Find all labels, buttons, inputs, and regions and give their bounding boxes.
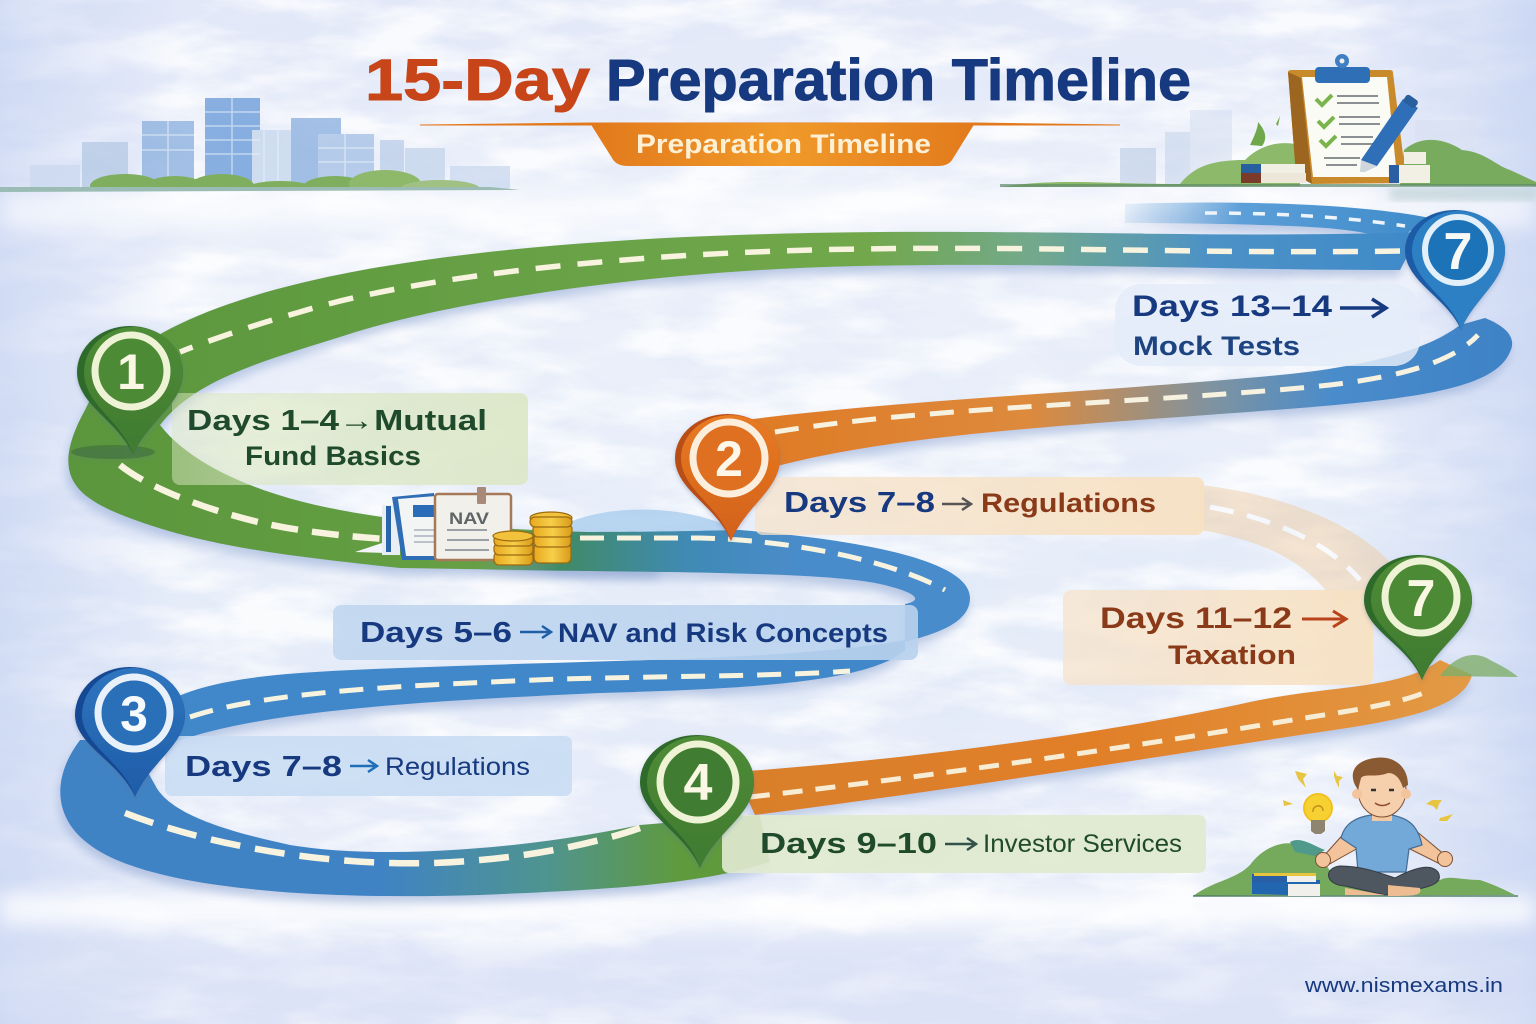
road: blue bend — [480, 527, 970, 642]
label: days 9-10: Investor Services — [983, 830, 1182, 858]
road: orange to blue upper band — [745, 318, 1512, 468]
pin 3: 3 — [120, 686, 148, 742]
title — [365, 48, 1191, 113]
pin 7 blue: 7 — [1444, 223, 1472, 281]
road: orange lower band — [735, 660, 1472, 815]
label: days 11-12: Taxation — [1168, 640, 1296, 670]
pin 1: 1 — [117, 344, 145, 400]
pin 7 blue — [1405, 210, 1505, 330]
label: days 5-6 — [333, 605, 918, 660]
label: days 9-10: Days 9–10 — [760, 828, 937, 860]
label: days 7-8 regulations blue: Regulations — [385, 753, 530, 781]
road: pale blue strip behind bend — [570, 510, 725, 537]
title: 15-Day — [365, 48, 590, 113]
subtitle ribbon — [420, 123, 1120, 166]
label: days 5-6: NAV and Risk Concepts — [558, 618, 888, 648]
pin 3 — [75, 667, 185, 797]
pin 1 — [71, 326, 183, 459]
icon: meditating student with bulb and books — [1193, 757, 1518, 897]
label: days 1-4: Fund Basics — [245, 441, 421, 471]
label: days 11-12: Days 11–12 — [1100, 602, 1292, 635]
pin 2: 2 — [715, 431, 743, 487]
website url: www.nismexams.in — [1304, 975, 1503, 997]
icon: NAV document and coins: NAV — [449, 509, 490, 528]
road: green main band — [68, 232, 1420, 572]
label: days 5-6: Days 5–6 — [360, 617, 512, 649]
label: days 9-10 — [722, 815, 1206, 873]
pin 7 green — [1364, 555, 1472, 680]
road: top return blue — [1125, 203, 1430, 241]
label: days 13-14: Mock Tests — [1133, 331, 1300, 361]
label: days 7-8 regulations orange: Regulations — [981, 488, 1156, 518]
road: blue return band — [170, 640, 905, 742]
road: blue to green lower loop — [60, 740, 770, 896]
label: days 11-12 — [1063, 590, 1373, 685]
label: days 7-8 regulations blue — [165, 736, 572, 796]
label: days 7-8 regulations orange: Days 7–8 — [784, 487, 935, 519]
pin 7 green: 7 — [1407, 570, 1435, 628]
pin 2 — [675, 414, 780, 541]
label: days 7-8 regulations blue: Days 7–8 — [185, 751, 342, 783]
scenery right of title — [1000, 110, 1536, 201]
pin 4 — [640, 735, 754, 868]
icon: NAV document and coins — [355, 487, 572, 565]
road: faded segment to taxation — [1200, 485, 1400, 610]
subtitle ribbon: Preparation Timeline — [636, 129, 931, 159]
city skyline left — [0, 98, 520, 199]
label: days 1-4: Days 1–4→Mutual — [187, 405, 487, 437]
label: days 1-4 — [172, 393, 528, 485]
title: Preparation Timeline — [606, 48, 1191, 113]
label: days 13-14 — [1115, 284, 1420, 366]
bushes beside green pin — [1440, 655, 1518, 677]
pin 4: 4 — [684, 754, 713, 812]
icon: clipboard with checklist, pen and books — [1241, 54, 1430, 184]
label: days 13-14: Days 13–14 — [1132, 290, 1332, 323]
label: days 7-8 regulations orange — [755, 477, 1204, 535]
